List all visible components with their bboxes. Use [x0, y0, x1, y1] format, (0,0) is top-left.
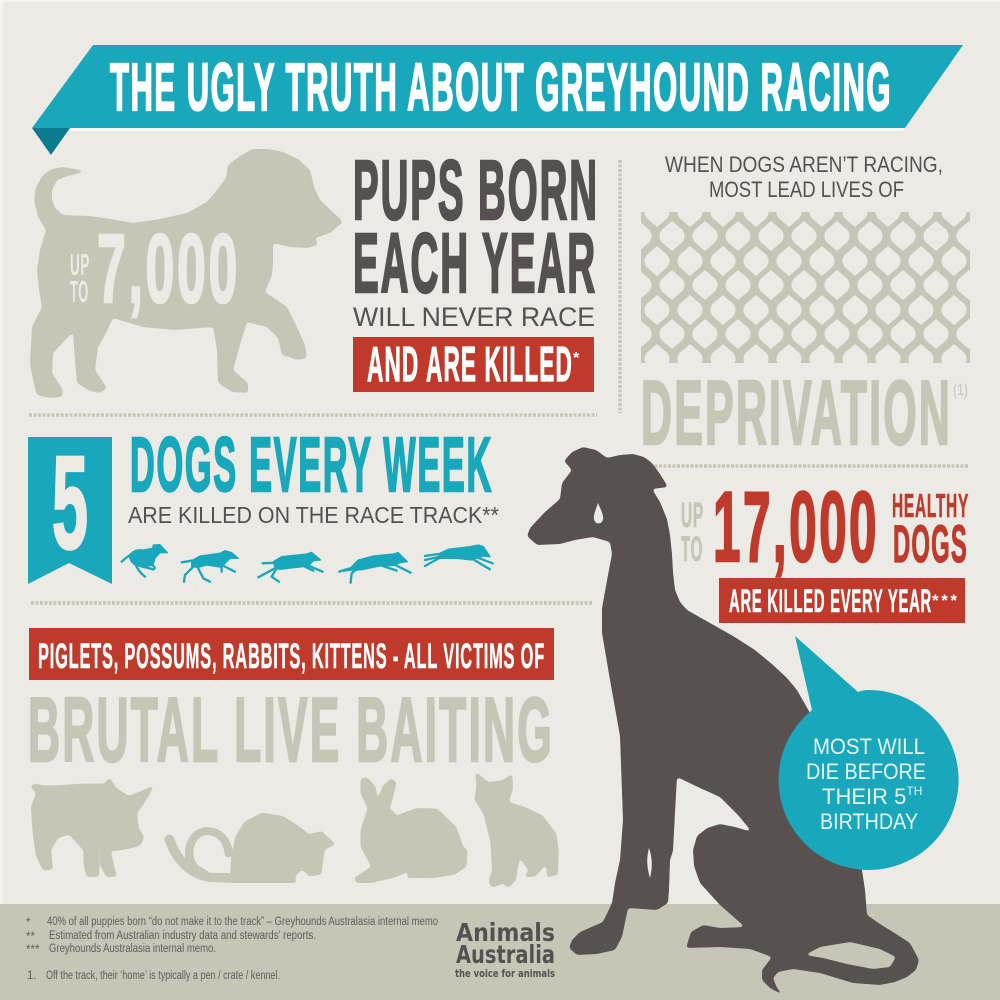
note 4: Off the track, their ‘home’ is typically a pen / crate / kennel. [46, 970, 280, 982]
bubble line 4: BIRTHDAY [820, 809, 918, 834]
greyhound silhouette [527, 447, 919, 997]
icon: pig [30, 777, 155, 877]
icon: puppy silhouette [30, 149, 343, 398]
intro line 2: MOST LEAD LIVES OF [709, 177, 904, 202]
panel: pups: UP [70, 247, 90, 282]
note 1: 40% of all puppies born “do not make it to the track” – Greyhounds Australasia internal memo [47, 916, 438, 928]
logo tagline: the voice for animals [455, 968, 555, 980]
asterisks: *** [932, 591, 957, 610]
footnote marker: (1) [953, 382, 968, 399]
text: EACH YEAR [353, 216, 597, 310]
bubble line 3: THEIR 5 [822, 784, 906, 809]
logo word 2: Australia [456, 940, 555, 969]
bubble line 2: DIE BEFORE [806, 759, 926, 784]
panel: pups: TO [70, 274, 89, 309]
red label [29, 628, 554, 680]
note star 1: * [26, 917, 31, 929]
intro line 1: WHEN DOGS AREN’T RACING, [665, 152, 943, 177]
panel: live baiting [28, 628, 559, 888]
footer band [0, 904, 1000, 1000]
asterisk: * [573, 350, 580, 367]
bubble line 3: TH [906, 784, 922, 798]
icon: tear [594, 503, 603, 524]
subheading: ARE KILLED ON THE RACE TRACK** [128, 502, 499, 528]
big number 7,000: 7,000 [97, 214, 240, 323]
panel: pups: AND ARE KILLED [367, 338, 573, 392]
panel: 17,000: TO [681, 530, 703, 569]
bubble line 1: MOST WILL [813, 734, 925, 759]
note star 2: ** [26, 931, 35, 943]
note star 3: *** [26, 944, 40, 956]
note number: 1. [27, 970, 37, 982]
title ribbon [32, 45, 963, 157]
note 2: Estimated from Australian industry data and stewards’ reports. [49, 930, 316, 942]
icon: kitten [475, 771, 559, 888]
icon: possum [169, 813, 336, 883]
panel: 5 dogs every week: 5 [52, 429, 88, 576]
gap between front legs [647, 848, 652, 878]
note 3: Greyhounds Australasia internal memo. [49, 943, 216, 955]
icon: rabbit [354, 777, 467, 883]
panel: pups [30, 143, 599, 398]
text: PUPS BORN [353, 143, 599, 237]
logo: Animals Australia [455, 918, 555, 980]
icons: running greyhounds [122, 545, 493, 583]
panel: 17,000 [681, 471, 969, 623]
icons: pig possum rabbit kitten [30, 771, 559, 888]
dividers [29, 160, 968, 603]
red label [353, 337, 594, 392]
panel: deprivation [641, 152, 970, 464]
panel: 5 dogs every week [28, 422, 499, 584]
chain-link fence [641, 212, 970, 363]
bookmark ribbon [28, 437, 112, 584]
panel: 17,000: UP [681, 496, 704, 535]
will never race: WILL NEVER RACE [353, 302, 595, 332]
text: DOGS EVERY WEEK [130, 422, 493, 508]
footnotes [26, 916, 438, 982]
logo word 1: Animals [456, 918, 555, 947]
speech bubble [779, 636, 959, 870]
red label [719, 578, 965, 623]
